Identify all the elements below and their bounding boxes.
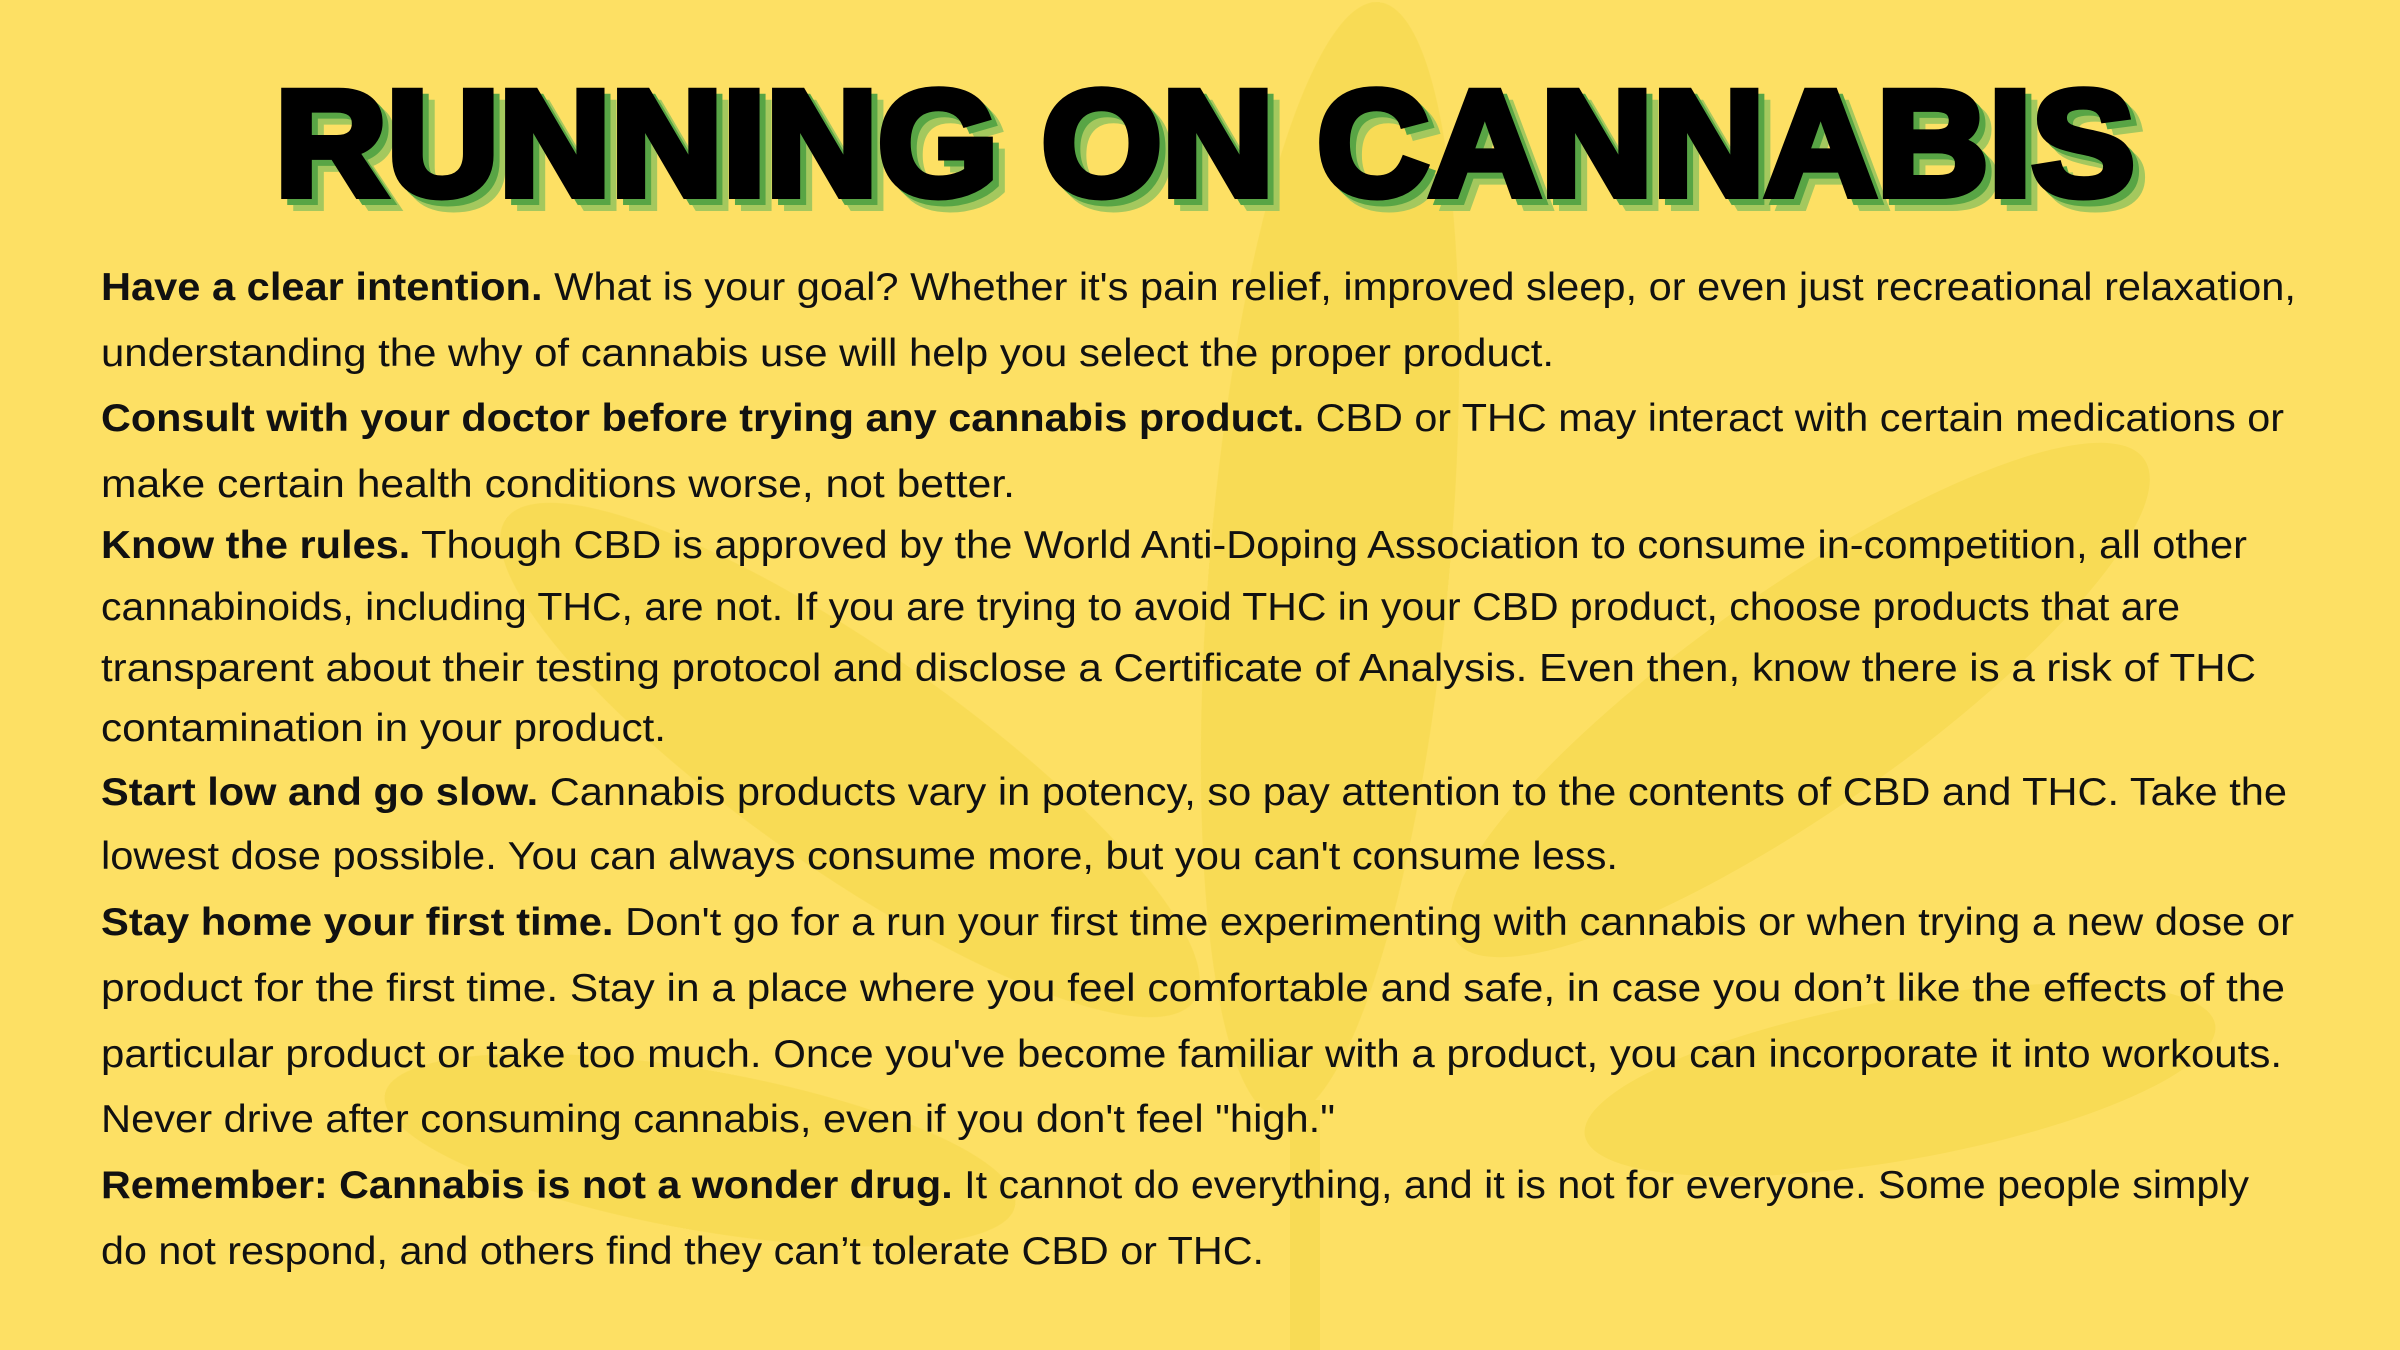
tip: start low (101, 771, 2287, 878)
tip: clear intention: understanding the why of cannabis use will help you select the proper product. (101, 332, 1554, 375)
tip: not a wonder drug (101, 1164, 2250, 1273)
tip: not a wonder drug: Remember: Cannabis is not a wonder drug. It cannot do everything, and it is not for everyone. Some people simply (101, 1164, 2250, 1207)
tip: consult doctor (101, 397, 2284, 506)
title: RUNNING ON CANNABIS (275, 59, 2135, 227)
tip: start low: Start low and go slow. Cannabis products vary in potency, so pay attention to the contents of CBD and THC. Take the (101, 771, 2287, 814)
tip: clear intention (101, 266, 2296, 375)
tip: stay home: particular product or take too much. Once you've become familiar with a product, you can incorporate it into workouts. (101, 1033, 2282, 1076)
tip: consult doctor: make certain health conditions worse, not better. (101, 463, 1015, 506)
tip: stay home: Stay home your first time. Don't go for a run your first time experimenting with cannabis or when trying a new dose or (101, 901, 2294, 944)
tip: know the rules: transparent about their testing protocol and disclose a Certificate of Analysis. Even then, know there is a risk of THC (101, 647, 2256, 690)
title: RUNNING ON CANNABIS (281, 65, 2141, 233)
tip: clear intention: Have a clear intention. What is your goal? Whether it's pain relief, improved sleep, or even just recreational relaxation, (101, 266, 2296, 309)
tip: stay home: Never drive after consuming cannabis, even if you don't feel "high." (101, 1098, 1335, 1141)
tip: stay home: product for the first time. Stay in a place where you feel comfortable and safe, in case you don’t like the effects of the (101, 967, 2285, 1010)
tip: know the rules: contamination in your product. (101, 707, 666, 750)
tip: consult doctor: Consult with your doctor before trying any cannabis product. CBD or THC may interact with certain medications or (101, 397, 2284, 440)
title: RUNNING ON CANNABIS (287, 71, 2147, 239)
tip: not a wonder drug: do not respond, and others find they can’t tolerate CBD or THC. (101, 1230, 1264, 1273)
tip: know the rules: Know the rules. Though CBD is approved by the World Anti-Doping Association to consume in-competition, all other (101, 524, 2247, 567)
tip: stay home (101, 901, 2294, 1141)
tip: start low: lowest dose possible. You can always consume more, but you can't consume less. (101, 835, 1618, 878)
tip: know the rules (101, 524, 2256, 750)
tip: know the rules: cannabinoids, including THC, are not. If you are trying to avoid THC in your CBD product, choose products that are (101, 586, 2180, 629)
